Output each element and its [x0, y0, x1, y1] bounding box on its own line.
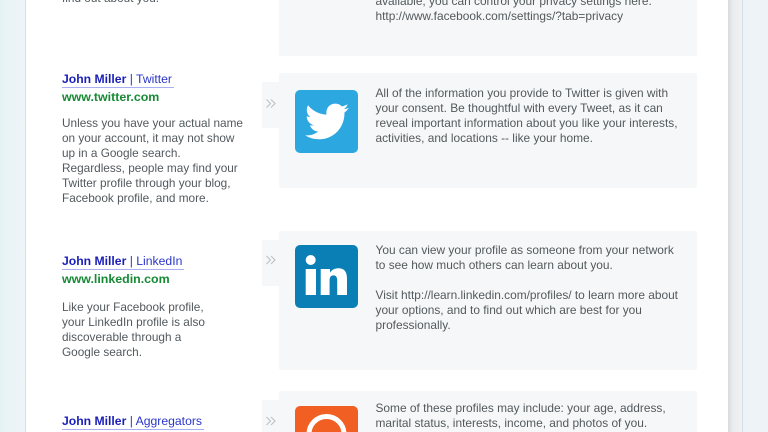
- linkedin url: www.linkedin.com: [62, 272, 170, 286]
- aggregators privacy text: marital status, interests, income, and photos of you.: [376, 416, 647, 430]
- arrow tab: aggregators: [262, 400, 279, 432]
- linkedin description: Google search.: [62, 345, 142, 359]
- linkedin privacy text: your options, and to find out which are best for you: [376, 303, 642, 317]
- arrow tab: twitter: [262, 82, 279, 128]
- sheet shadow right: [728, 0, 743, 432]
- panel: facebook privacy: [279, 0, 697, 56]
- aggregators privacy text: [376, 401, 666, 430]
- linkedin privacy text: professionally.: [376, 318, 451, 332]
- icon: twitter: [295, 90, 358, 153]
- facebook privacy text: http://www.facebook.com/settings/?tab=privacy: [376, 8, 623, 22]
- twitter description: up in a Google search.: [62, 146, 181, 160]
- panel: linkedin privacy: [279, 231, 697, 370]
- section: twitter search result: [62, 72, 243, 205]
- twitter name link: John Miller | Twitter: [62, 72, 172, 86]
- twitter description: Regardless, people may find your: [62, 161, 238, 175]
- twitter description: Facebook profile, and more.: [62, 191, 209, 205]
- twitter privacy text: All of the information you provide to Twitter is given with: [376, 86, 668, 100]
- aggregators privacy text: Some of these profiles may include: your age, address,: [376, 401, 666, 415]
- twitter privacy text: your consent. Be thoughtful with every Tweet, as it can: [376, 100, 663, 114]
- arrow tab: linkedin: [262, 240, 279, 286]
- linkedin description: [62, 300, 205, 359]
- panel: aggregators privacy: [279, 391, 697, 432]
- linkedin privacy text: to see how much others can learn about you.: [376, 258, 613, 272]
- twitter privacy text: [376, 86, 678, 144]
- twitter description: [62, 116, 243, 205]
- twitter privacy text: activities, and locations -- like your home.: [376, 130, 593, 144]
- icon: linkedin: [295, 245, 358, 308]
- twitter description: Twitter profile through your blog,: [62, 176, 231, 190]
- twitter url: www.twitter.com: [62, 90, 159, 104]
- twitter description: Unless you have your actual name: [62, 116, 243, 130]
- linkedin description: Like your Facebook profile,: [62, 300, 204, 314]
- aggregators name link: John Miller | Aggregators: [62, 414, 202, 428]
- linkedin description: your LinkedIn profile is also: [62, 315, 205, 329]
- section: linkedin search result: [62, 254, 205, 359]
- twitter description: on your account, it may not show: [62, 131, 234, 145]
- panel: twitter privacy: [279, 73, 697, 188]
- linkedin privacy text: [376, 243, 678, 332]
- linkedin name link: John Miller | LinkedIn: [62, 254, 182, 268]
- linkedin description: discoverable through a: [62, 330, 181, 344]
- icon: aggregators: [295, 406, 358, 432]
- linkedin privacy text: Visit http://learn.linkedin.com/profiles/ to learn more about: [376, 288, 678, 302]
- page background left: [0, 0, 25, 432]
- twitter privacy text: reveal important information about you like your interests,: [376, 116, 678, 130]
- linkedin privacy text: You can view your profile as someone from your network: [376, 243, 674, 257]
- facebook privacy text: [376, 0, 652, 22]
